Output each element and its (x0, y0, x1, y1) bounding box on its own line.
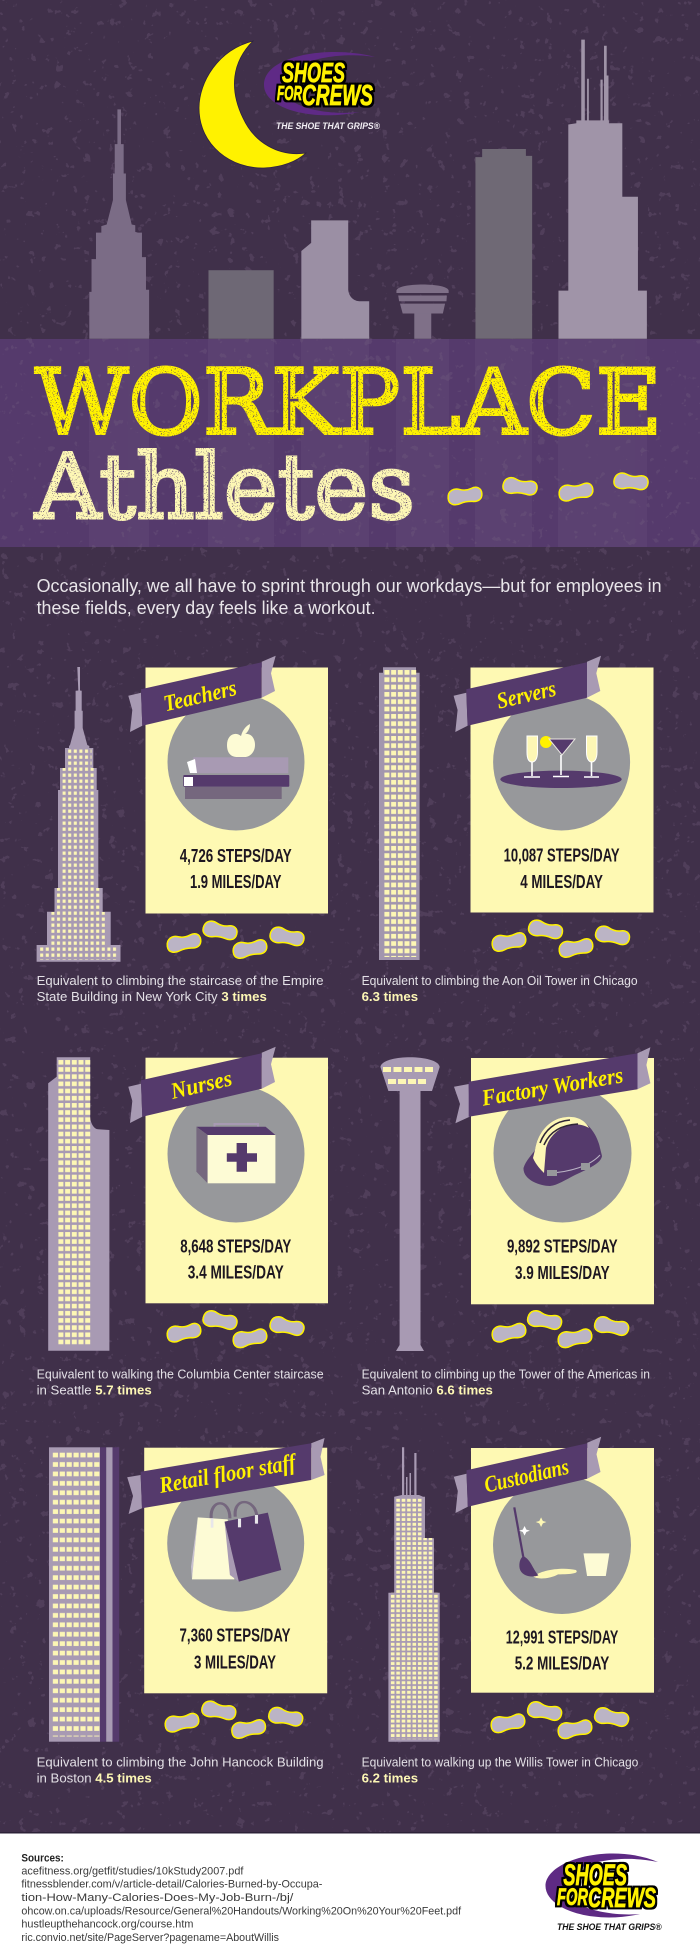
banner label: Servers (494, 676, 558, 714)
caption: in Seattle 5.7 times (37, 1382, 152, 1397)
footprints (164, 1699, 304, 1739)
logo wordmark (557, 1859, 656, 1913)
footer (0, 1832, 700, 1955)
banner label: Retail floor staff (156, 1449, 299, 1498)
caption: in Boston 4.5 times (37, 1771, 152, 1786)
sources list: ric.convio.net/site/PageServer?pagename=AboutWillis (21, 1932, 279, 1944)
icon circle (168, 694, 304, 830)
stats: 7,360 STEPS/DAY (180, 1625, 291, 1646)
caption (37, 1755, 324, 1786)
stats: 8,648 STEPS/DAY (180, 1235, 292, 1256)
logo swoosh (264, 52, 375, 115)
stats: 4 MILES/DAY (520, 871, 603, 892)
stats: 3 MILES/DAY (194, 1651, 276, 1672)
sources list (21, 1853, 462, 1944)
panel: factory workers (362, 1047, 654, 1397)
icon: mop and spill (514, 1507, 609, 1578)
icon: shopping bags (191, 1502, 281, 1582)
building: Aon Oil Tower (379, 667, 420, 960)
title band (0, 339, 700, 547)
sources list: ohcow.on.ca/uploads/Resource/General%20Handouts/Working%20On%20Your%20Feet.pdf (21, 1905, 462, 1917)
building: Empire State (89, 109, 149, 339)
banner label: Teachers (161, 675, 239, 716)
footprints in title band (447, 472, 649, 505)
title (34, 350, 662, 540)
stats (180, 1235, 292, 1282)
stats: 10,087 STEPS/DAY (504, 845, 620, 866)
icon circle (167, 1475, 304, 1612)
footprints (166, 919, 305, 959)
caption (362, 973, 638, 1004)
panel: servers (362, 656, 654, 1004)
logo wordmark: CREWS (302, 80, 373, 112)
ribbon banner (128, 656, 276, 732)
ribbon banner (127, 1438, 325, 1514)
icon: drinks on a tray (500, 736, 622, 788)
sources list: fitnessblender.com/v/article-detail/Calories-Burned-by-Occupa- (21, 1879, 323, 1891)
sources list: hustleupthehancock.org/course.htm (21, 1919, 193, 1931)
card (146, 668, 328, 914)
caption: Equivalent to walking up the Willis Tower in Chicago (362, 1755, 638, 1770)
skyline (89, 40, 647, 339)
stats (507, 1235, 618, 1283)
icon circle (494, 1084, 632, 1222)
logo: Shoes for Crews (264, 52, 380, 132)
intro text: Occasionally, we all have to sprint through our workdays—but for employees in (37, 576, 662, 596)
building: Willis Tower (558, 40, 647, 339)
logo wordmark: FOR (557, 1884, 588, 1911)
caption: San Antonio 6.6 times (362, 1382, 493, 1397)
sources list: acefitness.org/getfit/studies/10kStudy2007.pdf (21, 1865, 244, 1877)
ribbon banner (454, 1437, 601, 1513)
title line: Workplace: WORKPLACE (35, 350, 662, 456)
caption (362, 1366, 650, 1397)
logo wordmark (277, 57, 373, 112)
building: Tower of the Americas (396, 284, 449, 339)
ribbon banner (128, 1047, 276, 1123)
caption (37, 973, 324, 1004)
logo swoosh (546, 1853, 658, 1917)
icon: books and apple (183, 724, 289, 799)
stats (180, 845, 292, 892)
building: John Hancock (49, 1447, 119, 1742)
icon circle (493, 694, 630, 830)
card (471, 1058, 654, 1304)
footprints (166, 1309, 305, 1348)
caption: Equivalent to walking the Columbia Center staircase (37, 1366, 324, 1381)
stats: 12,991 STEPS/DAY (506, 1626, 619, 1647)
building: Tower of the Americas (380, 1057, 440, 1351)
caption: State Building in New York City 3 times (37, 989, 267, 1004)
caption (362, 1755, 638, 1786)
icon circle (168, 1086, 304, 1222)
footprints (491, 1309, 630, 1348)
stats (180, 1625, 291, 1672)
icon: first aid kit (196, 1124, 275, 1183)
building: Columbia Center (48, 1057, 109, 1351)
logo wordmark: FOR (277, 83, 302, 105)
panel: retail floor staff (37, 1438, 327, 1786)
building: Columbia Center (301, 220, 369, 339)
caption: Equivalent to climbing the staircase of the Empire (37, 973, 324, 988)
logo wordmark: CREWS (588, 1882, 656, 1913)
band reflections of the skyline (89, 339, 647, 547)
building: Aon Oil Tower (475, 149, 532, 339)
card (470, 668, 654, 912)
building: Empire State Building (37, 667, 120, 962)
stats: 1.9 MILES/DAY (190, 871, 282, 892)
icon circle (493, 1476, 631, 1614)
banner label: Custodians (482, 1454, 571, 1498)
logo wordmark: SHOES (282, 57, 345, 88)
caption: 6.2 times (362, 1771, 418, 1786)
sources list: Sources: (21, 1853, 64, 1865)
banner label: Nurses (167, 1066, 234, 1104)
logo wordmark: SHOES (563, 1859, 627, 1892)
logo tagline: THE SHOE THAT GRIPS® (276, 121, 380, 132)
panel: teachers (37, 656, 328, 1004)
ribbon banner (454, 1047, 650, 1123)
caption: Equivalent to climbing the John Hancock Building (37, 1755, 324, 1770)
intro text (37, 576, 662, 618)
footprints (490, 1700, 630, 1739)
caption: Equivalent to climbing the Aon Oil Tower in Chicago (362, 973, 638, 988)
caption (37, 1366, 324, 1397)
building: Aon block (208, 270, 274, 339)
ribbon banner (454, 656, 601, 732)
stats: 5.2 MILES/DAY (515, 1652, 610, 1673)
footprints (491, 918, 631, 958)
logo: footer (546, 1853, 662, 1933)
card (146, 1058, 328, 1303)
banner label: Factory Workers (479, 1062, 625, 1111)
card (471, 1448, 654, 1693)
panel: custodians (362, 1437, 654, 1786)
caption: Equivalent to climbing up the Tower of the Americas in (362, 1366, 650, 1381)
icon: hard hat (523, 1117, 602, 1186)
stats (506, 1626, 619, 1673)
logo tagline: THE SHOE THAT GRIPS® (557, 1922, 662, 1933)
intro text: these fields, every day feels like a workout. (37, 598, 376, 618)
panel: nurses (37, 1047, 328, 1397)
stats: 4,726 STEPS/DAY (180, 845, 292, 866)
stats: 9,892 STEPS/DAY (507, 1235, 618, 1256)
stats: 3.4 MILES/DAY (188, 1261, 284, 1282)
stats (504, 845, 620, 892)
caption: 6.3 times (362, 989, 418, 1004)
title line: Athletes: Athletes (34, 435, 415, 540)
sources list: tion-How-Many-Calories-Does-My-Job-Burn-/bj/ (21, 1892, 294, 1904)
moon (199, 41, 306, 168)
building: Willis Tower (388, 1447, 440, 1742)
card (144, 1448, 327, 1693)
stats: 3.9 MILES/DAY (515, 1262, 610, 1283)
